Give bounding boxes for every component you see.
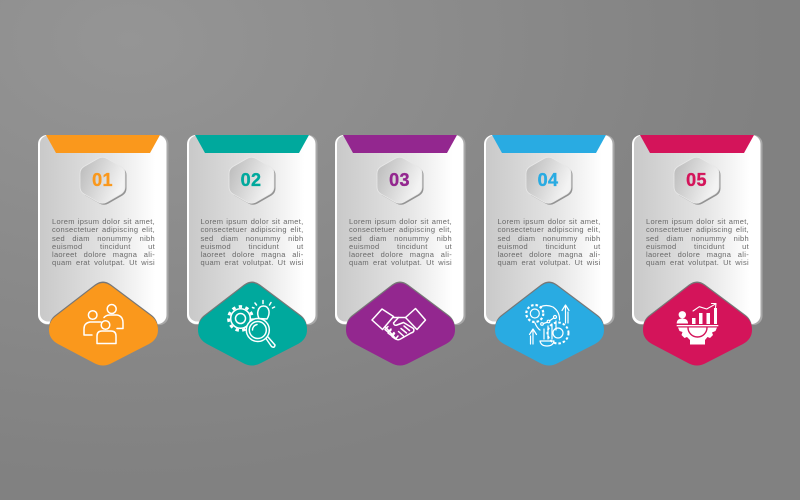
text block 01: euismod tincidunt ut — [52, 242, 155, 251]
text block 04: quam erat volutpat. Ut wisi — [498, 258, 600, 267]
text block 03: sed diam nonummy nibh — [349, 234, 452, 243]
text block 03: quam erat volutpat. Ut wisi — [349, 258, 452, 267]
icon: handshake — [371, 308, 426, 340]
number 03: 03 — [389, 170, 410, 190]
text block 01: quam erat volutpat. Ut wisi — [52, 258, 155, 267]
text block 05: laoreet dolore magna ali- — [646, 250, 749, 259]
card body 03 — [335, 135, 466, 366]
card body 05 — [632, 135, 762, 366]
panel: step 05 — [632, 135, 762, 366]
text block 04 — [498, 217, 600, 267]
text block 05: euismod tincidunt ut — [646, 242, 749, 251]
text block 03: consectetuer adipiscing elit, — [349, 225, 452, 234]
text block 05: Lorem ipsum dolor sit amet, — [646, 217, 749, 226]
panel: step 02 — [187, 135, 318, 366]
text block 04: euismod tincidunt ut — [498, 242, 600, 251]
text block 01: laoreet dolore magna ali- — [52, 250, 155, 259]
text block 02: sed diam nonummy nibh — [200, 234, 304, 243]
icon: person, chart and gear — [676, 303, 718, 344]
icon: growth gears and arrows — [525, 304, 570, 347]
text block 02: consectetuer adipiscing elit, — [200, 225, 304, 234]
panel: step 04 — [484, 135, 614, 366]
text block 05: sed diam nonummy nibh — [646, 234, 749, 243]
text block 01: consectetuer adipiscing elit, — [52, 225, 155, 234]
text block 02: Lorem ipsum dolor sit amet, — [200, 217, 304, 226]
number 05: 05 — [686, 170, 707, 190]
text block 02: laoreet dolore magna ali- — [200, 250, 304, 259]
number 02: 02 — [241, 170, 261, 190]
text block 01: sed diam nonummy nibh — [52, 234, 155, 243]
text block 05 — [646, 217, 749, 267]
text block 01: Lorem ipsum dolor sit amet, — [52, 217, 155, 226]
text block 05: consectetuer adipiscing elit, — [646, 225, 749, 234]
text block 02: quam erat volutpat. Ut wisi — [200, 258, 304, 267]
text block 04: consectetuer adipiscing elit, — [498, 225, 600, 234]
panel: step 03 — [335, 135, 466, 366]
text block 03: laoreet dolore magna ali- — [349, 250, 452, 259]
icon: gear, magnifier and bulb — [227, 300, 276, 348]
text block 02: euismod tincidunt ut — [200, 242, 304, 251]
text block 05: quam erat volutpat. Ut wisi — [646, 258, 749, 267]
panel: step 01 — [38, 135, 168, 366]
number 04: 04 — [538, 170, 558, 190]
text block 01 — [52, 217, 155, 267]
text block 03: Lorem ipsum dolor sit amet, — [349, 217, 452, 226]
card body 02 — [187, 135, 318, 366]
text block 04: sed diam nonummy nibh — [498, 234, 600, 243]
text block 03: euismod tincidunt ut — [349, 242, 452, 251]
text block 04: laoreet dolore magna ali- — [498, 250, 600, 259]
icon: people — [83, 304, 124, 344]
card body 01 — [38, 135, 168, 366]
text block 02 — [200, 217, 304, 267]
text block 03 — [349, 217, 452, 267]
text block 04: Lorem ipsum dolor sit amet, — [498, 217, 600, 226]
card body 04 — [484, 135, 614, 366]
number 01: 01 — [92, 170, 113, 190]
